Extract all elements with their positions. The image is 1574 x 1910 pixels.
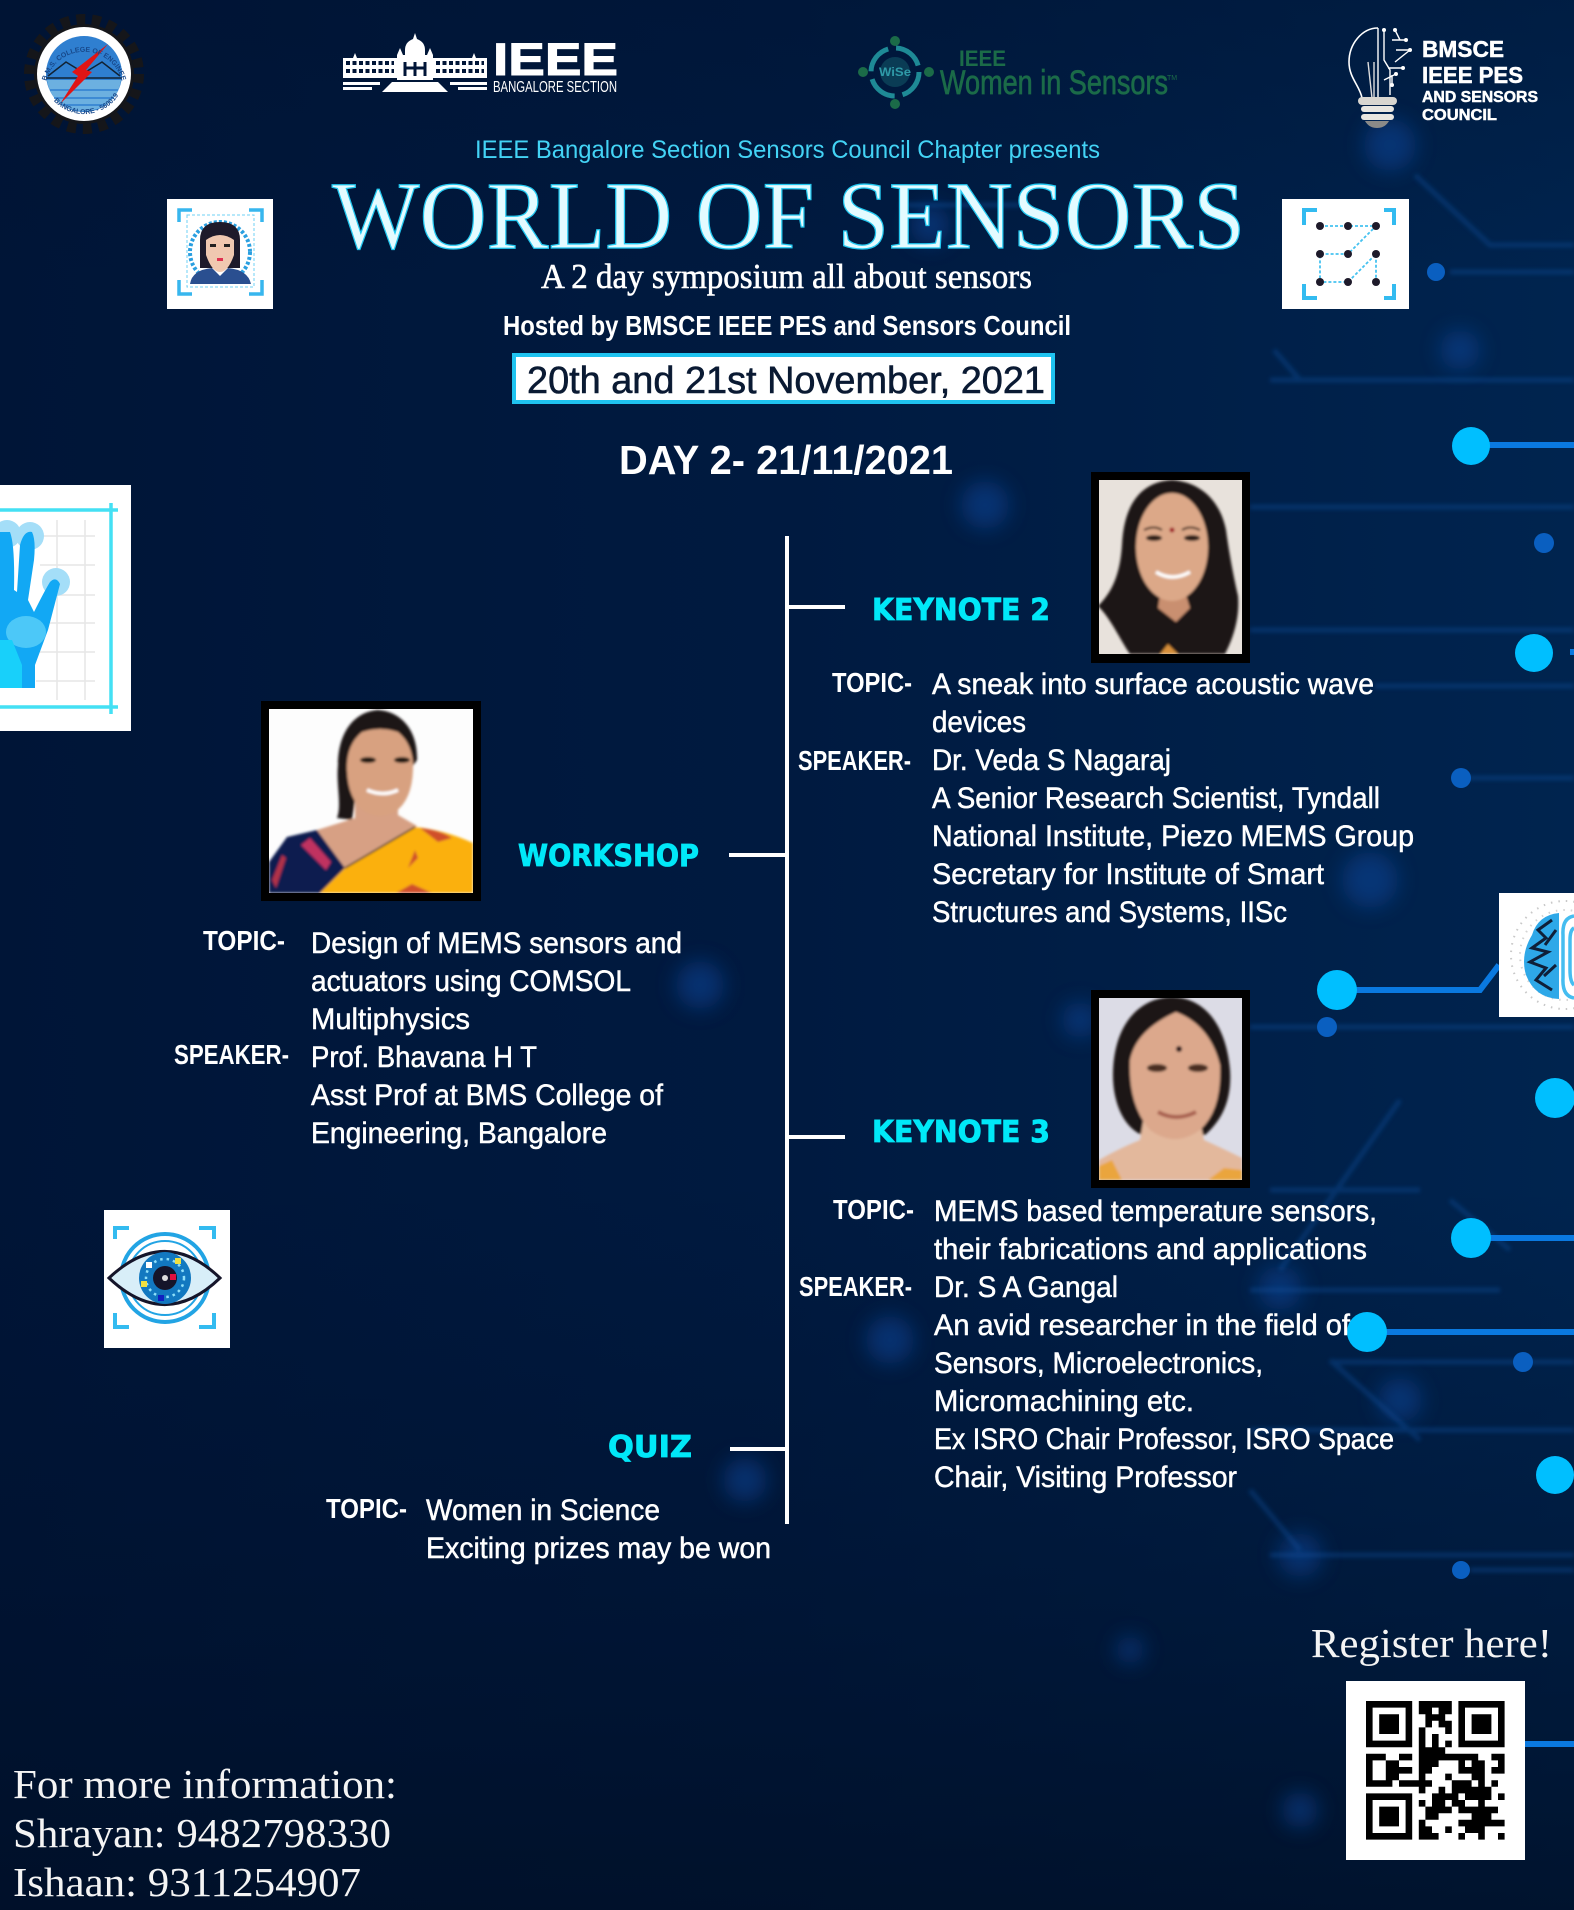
- keynote 3 details: Ex ISRO Chair Professor, ISRO Space: [934, 1423, 1394, 1456]
- logo: IEEE Women in Sensors: TM: [1167, 75, 1177, 82]
- keynote 2 details: A sneak into surface acoustic wave: [932, 668, 1374, 701]
- logo: IEEE Women in Sensors: [858, 36, 1177, 109]
- label: quiz: QUIZ: [608, 1430, 692, 1465]
- logo: BMS College of Engineering: [24, 14, 144, 134]
- workshop details: Asst Prof at BMS College of: [311, 1079, 664, 1112]
- quiz details: [326, 1493, 771, 1565]
- logo: IEEE Women in Sensors: IEEE: [959, 46, 1006, 71]
- title: WORLD OF SENSORS: [332, 162, 1245, 269]
- timeline: [729, 536, 845, 1524]
- speaker photo: Dr. Veda S Nagaraj: [1091, 472, 1250, 663]
- logo: IEEE Bangalore Section: IEEE: [493, 34, 618, 85]
- logo: BMSCE IEEE PES and Sensors Council: IEEE PES: [1422, 62, 1523, 88]
- icon: hand touch sensor: [0, 485, 131, 731]
- keynote 2 details: Dr. Veda S Nagaraj: [932, 744, 1171, 777]
- contact information: For more information:: [13, 1761, 397, 1807]
- workshop details: SPEAKER-: [174, 1039, 289, 1070]
- logo: BMSCE IEEE PES and Sensors Council: AND SENSORS: [1422, 89, 1538, 106]
- keynote 3 details: Chair, Visiting Professor: [934, 1461, 1237, 1494]
- date box: 20th and 21st November, 2021: [527, 360, 1045, 402]
- QR code: [1346, 1681, 1525, 1860]
- quiz details: Exciting prizes may be won: [426, 1532, 771, 1565]
- keynote 2 details: Structures and Systems, IISc: [932, 896, 1287, 929]
- quiz details: TOPIC-: [326, 1493, 407, 1524]
- keynote 2 details: [798, 667, 1414, 929]
- workshop details: actuators using COMSOL: [311, 965, 631, 998]
- contact information: Ishaan: 9311254907: [13, 1859, 361, 1905]
- host line: Hosted by BMSCE IEEE PES and Sensors Council: [503, 310, 1071, 341]
- logo: BMS College of Engineering: BANGALORE - 560019: [54, 93, 118, 114]
- logo: IEEE Bangalore Section: BANGALORE SECTION: [493, 79, 617, 96]
- icon: brain fingerprint: [1499, 893, 1574, 1017]
- keynote 3 details: Dr. S A Gangal: [934, 1271, 1118, 1304]
- icon: face recognition: [167, 199, 273, 309]
- workshop details: Prof. Bhavana H T: [311, 1041, 537, 1074]
- workshop details: TOPIC-: [203, 925, 285, 956]
- logo: IEEE Women in Sensors: Women in Sensors: [940, 64, 1168, 102]
- logo: BMSCE IEEE PES and Sensors Council: COUNCIL: [1422, 107, 1497, 124]
- contact information: [13, 1761, 397, 1905]
- workshop details: [174, 925, 682, 1150]
- keynote 3 details: [799, 1194, 1394, 1494]
- speaker photo: Dr. S A Gangal: [1091, 990, 1250, 1188]
- logo: IEEE Bangalore Section: [343, 33, 618, 96]
- workshop details: Multiphysics: [311, 1003, 470, 1036]
- keynote 3 details: MEMS based temperature sensors,: [934, 1195, 1377, 1228]
- speaker photo: Prof. Bhavana H T: [261, 701, 481, 901]
- presenter line: IEEE Bangalore Section Sensors Council Chapter presents: [475, 136, 1100, 164]
- register prompt: Register here!: [1311, 1620, 1552, 1666]
- icon: eye scanner: [104, 1210, 230, 1348]
- logo: IEEE Women in Sensors: WiSe: [879, 65, 911, 79]
- quiz details: Women in Science: [426, 1494, 660, 1527]
- keynote 3 details: Micromachining etc.: [934, 1385, 1194, 1418]
- logo: BMSCE IEEE PES and Sensors Council: BMSCE: [1422, 36, 1504, 62]
- label: keynote 3: KEYNOTE 3: [872, 1115, 1050, 1150]
- logo: BMSCE IEEE PES and Sensors Council: [1349, 28, 1538, 128]
- icon: dot pattern: [1282, 199, 1409, 309]
- keynote 2 details: SPEAKER-: [798, 745, 911, 776]
- contact information: Shrayan: 9482798330: [13, 1810, 391, 1856]
- keynote 3 details: their fabrications and applications: [934, 1233, 1367, 1266]
- keynote 3 details: Sensors, Microelectronics,: [934, 1347, 1263, 1380]
- keynote 3 details: An avid researcher in the field of: [934, 1309, 1351, 1342]
- keynote 2 details: A Senior Research Scientist, Tyndall: [932, 782, 1380, 815]
- label: workshop: WORKSHOP: [518, 839, 699, 874]
- keynote 2 details: TOPIC-: [832, 667, 912, 698]
- keynote 2 details: Secretary for Institute of Smart: [932, 858, 1325, 891]
- keynote 2 details: National Institute, Piezo MEMS Group: [932, 820, 1414, 853]
- subtitle: A 2 day symposium all about sensors: [541, 257, 1032, 296]
- workshop details: Engineering, Bangalore: [311, 1117, 607, 1150]
- label: keynote 2: KEYNOTE 2: [872, 593, 1050, 628]
- keynote 3 details: TOPIC-: [833, 1194, 914, 1225]
- workshop details: Design of MEMS sensors and: [311, 927, 682, 960]
- day heading: DAY 2- 21/11/2021: [619, 437, 953, 483]
- keynote 3 details: SPEAKER-: [799, 1271, 912, 1302]
- keynote 2 details: devices: [932, 706, 1026, 739]
